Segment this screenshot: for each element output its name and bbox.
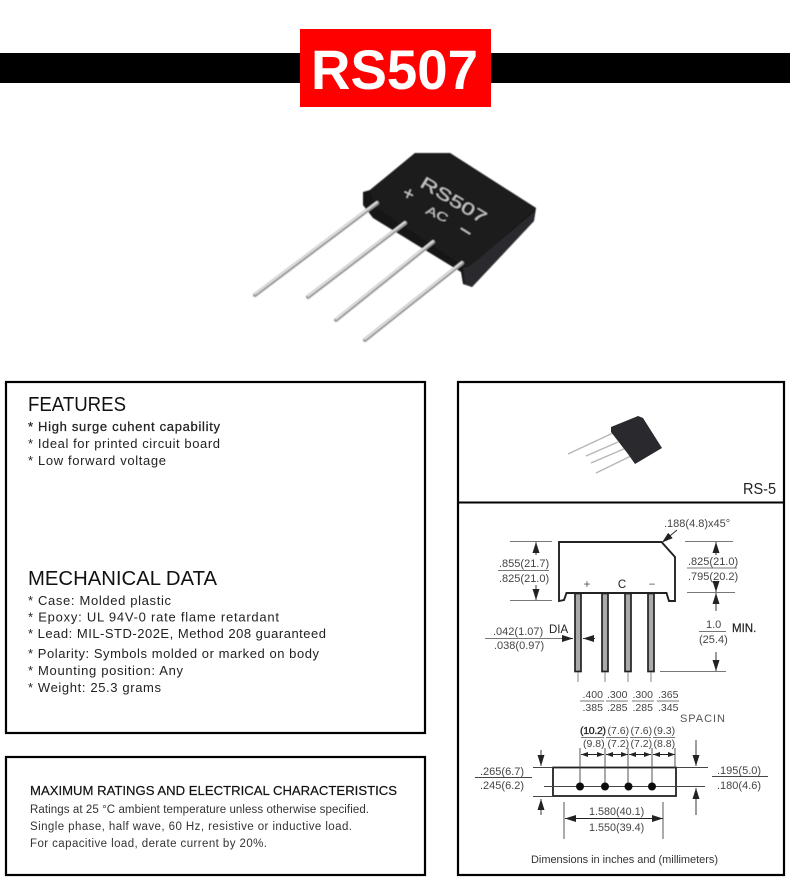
- spacing table: (7.2): [630, 738, 652, 750]
- ratings notes: Single phase, half wave, 60 Hz, resistive or inductive load.: [30, 821, 352, 833]
- dimension drawing: side view: +: [584, 579, 591, 591]
- dimensions caption: Dimensions in inches and (millimeters): [531, 854, 718, 866]
- heading: features: FEATURES: [28, 394, 126, 416]
- spacing table: .345: [658, 702, 679, 714]
- spacing table: [580, 689, 725, 750]
- spacing table: .285: [632, 702, 653, 714]
- spacing table: (8.8): [654, 738, 675, 750]
- spacing table: .385: [582, 702, 603, 714]
- mechanical data list: * Case: Molded plastic: [28, 593, 172, 608]
- spacing table: SPACIN: [680, 713, 725, 725]
- dimension labels: .038(0.97): [494, 640, 544, 652]
- mechanical data list: * Weight: 25.3 grams: [28, 680, 162, 695]
- panel: package and dimensions: [458, 382, 784, 875]
- heading: mechanical data: MECHANICAL DATA: [28, 568, 218, 590]
- features list: [28, 419, 220, 468]
- dimension drawing: side view: C: [618, 579, 626, 591]
- pin dots: [576, 782, 656, 790]
- mechanical data list: [28, 593, 326, 695]
- dimension labels: (25.4): [699, 634, 728, 646]
- dimension drawing: side view: DIA: [549, 624, 568, 636]
- arrows: [581, 754, 675, 756]
- dimension labels: .188(4.8)x45°: [664, 518, 730, 530]
- spacing table: (9.8): [583, 738, 605, 750]
- body markings: +: [399, 182, 418, 206]
- header banner: [0, 29, 790, 107]
- bottom labels: [480, 765, 761, 834]
- bottom labels: .265(6.7): [480, 766, 524, 778]
- dimension drawing: bottom view: [475, 740, 768, 839]
- dimension drawing: side view: −: [649, 579, 656, 591]
- dimension labels: .825(21.0): [688, 556, 738, 568]
- pins: [575, 594, 654, 672]
- panel: maximum ratings: [6, 757, 425, 875]
- dimension labels: 1.0: [706, 619, 721, 631]
- bottom labels: .245(6.2): [480, 780, 524, 792]
- spacing table: .285: [607, 702, 628, 714]
- features list: * Ideal for printed circuit board: [28, 436, 220, 451]
- dimension drawing: side view: [485, 518, 756, 682]
- dimension labels: .825(21.0): [499, 573, 549, 585]
- bottom labels: 1.580(40.1): [589, 806, 644, 818]
- product photo: RS507 bridge rectifier: [255, 153, 536, 340]
- spacing table: (7.6): [608, 725, 629, 737]
- spacing table: .400: [582, 689, 603, 701]
- spacing table: .300: [607, 689, 628, 701]
- spacing table: .365: [658, 689, 679, 701]
- mechanical data list: * Polarity: Symbols molded or marked on body: [28, 646, 320, 661]
- spacing table: (9.3): [654, 725, 675, 737]
- package thumbnail: [568, 416, 662, 473]
- bottom labels: 1.550(39.4): [589, 822, 644, 834]
- dimension labels: .042(1.07): [493, 626, 543, 638]
- features list: * Low forward voltage: [28, 453, 166, 468]
- mechanical data list: * Mounting position: Any: [28, 663, 184, 678]
- body markings: [399, 173, 490, 235]
- package label: RS-5: [743, 481, 776, 498]
- ratings heading: MAXIMUM RATINGS AND ELECTRICAL CHARACTERISTICS: [30, 783, 397, 798]
- bottom labels: .195(5.0): [717, 765, 761, 777]
- mechanical data list: * Epoxy: UL 94V-0 rate flame retardant: [28, 610, 279, 624]
- pins: [255, 202, 462, 340]
- body markings: AC: [424, 203, 451, 226]
- dimension labels: [493, 518, 738, 652]
- panel: features and mechanical data: [6, 382, 425, 733]
- spacing table: (7.2): [608, 738, 629, 750]
- spacing table: .300: [632, 689, 653, 701]
- features list: * High surge cuhent capability: [28, 419, 220, 434]
- spacing table: (7.6): [630, 725, 652, 737]
- ratings notes: Ratings at 25 °C ambient temperature unless otherwise specified.: [30, 804, 369, 816]
- mechanical data list: * Lead: MIL-STD-202E, Method 208 guaranteed: [28, 626, 326, 641]
- ratings notes: For capacitive load, derate current by 20%.: [30, 838, 267, 850]
- dimension arrows: [536, 530, 716, 671]
- title badge: RS507: [311, 38, 478, 101]
- dimension labels: .855(21.7): [499, 558, 549, 570]
- dimension labels: .795(20.2): [688, 571, 738, 583]
- spacing table: (10.2): [580, 725, 606, 737]
- dimension drawing: side view: MIN.: [732, 623, 756, 635]
- component body: [363, 153, 536, 287]
- bottom labels: .180(4.6): [717, 780, 761, 792]
- ratings notes: [30, 804, 369, 850]
- body markings: RS507: [417, 173, 490, 228]
